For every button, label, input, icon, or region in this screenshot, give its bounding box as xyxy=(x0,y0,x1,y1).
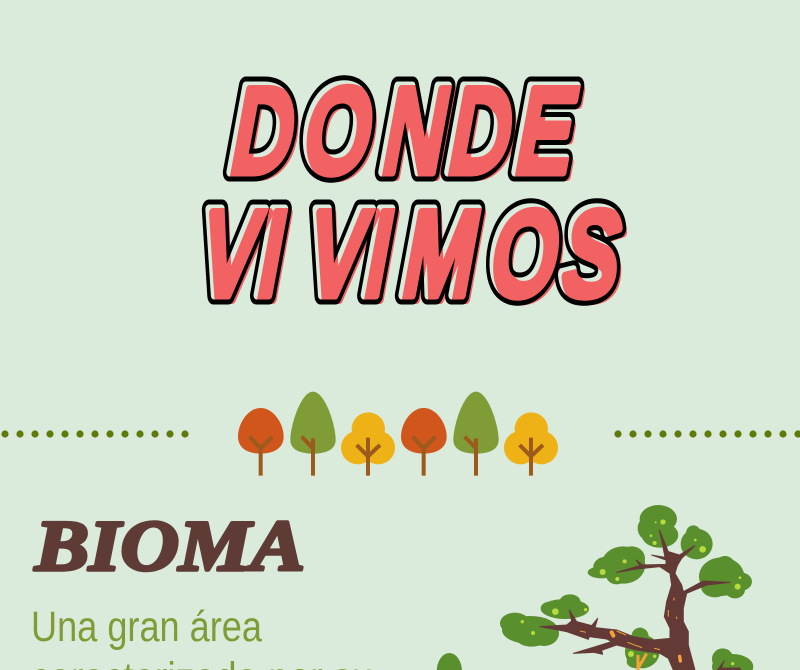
row of small trees xyxy=(238,392,558,476)
icon: yellow tree 1 xyxy=(341,412,395,476)
icon: green tree 2 xyxy=(453,392,499,476)
text block: biome definition: Una gran área xyxy=(31,603,262,651)
icon: orange tree 2 xyxy=(401,408,447,476)
title line: VIVIMOS: VIVIMOS xyxy=(200,186,627,326)
title xyxy=(202,75,628,306)
foliage spots xyxy=(521,519,741,665)
icon: orange tree 1 xyxy=(238,408,284,476)
tree trunk and branches xyxy=(540,530,730,670)
icon: yellow tree 2 xyxy=(504,412,558,476)
illustration: large tree xyxy=(437,505,753,670)
title line: DONDE: DONDE xyxy=(231,63,583,203)
dotted divider left xyxy=(1,430,189,438)
small orange sapling xyxy=(638,654,647,670)
dotted divider right xyxy=(614,430,800,438)
tree foliage xyxy=(437,505,753,670)
heading: BIOMA: BIOMA xyxy=(34,506,305,586)
trunk bark highlights xyxy=(580,598,680,661)
right lower branch xyxy=(717,659,742,670)
icon: green tree 1 xyxy=(290,392,336,476)
